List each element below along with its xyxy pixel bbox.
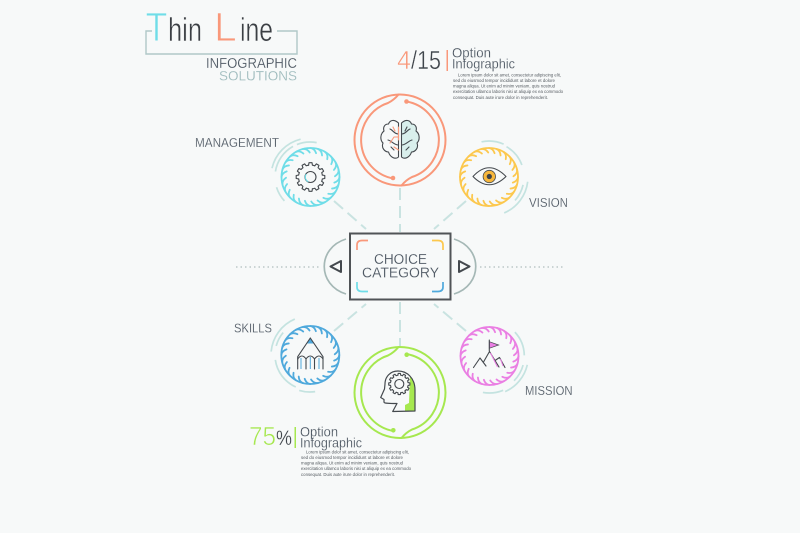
body text: sed do eiusmod tempor incididunt ut labore et dolore [301,455,403,460]
teeth [460,148,518,206]
ring [282,148,340,206]
body text: magna aliqua. Ut enim ad minim veniam, quis nostrud [301,460,403,466]
label: VISION [529,195,568,210]
body text: exercitation ullamco laboris nisi ut aliquip ex ea commodo [453,89,563,94]
ring dots [404,352,409,357]
number: 75 [249,421,276,451]
centre box [350,234,450,300]
bottom callout: % [276,427,292,450]
centre label: CHOICE [374,251,427,268]
icon: eye [473,168,506,185]
label: MANAGEMENT [195,136,279,150]
decorative arcs [261,128,359,226]
bottom callout: Infographic [300,434,362,450]
icon: gear [296,162,325,192]
ring [281,326,339,384]
management node [195,128,359,226]
top callout: Infographic [452,56,515,72]
bar [294,427,296,448]
decorative arcs [441,129,537,225]
label: MISSION [525,383,572,398]
vision node [441,129,568,225]
body text [301,450,411,477]
decorative arcs [440,307,539,405]
ring [460,327,518,385]
title word Thin remainder: hin [168,11,202,48]
right arc [454,239,476,294]
left arc [324,239,346,294]
mission node [440,307,572,405]
centre selector: CATEGORY [362,264,439,282]
head outline [381,371,415,412]
head gear [389,373,410,395]
bottom big circle with head [354,347,446,438]
body text: consequat. Duis aute irure dolor in reprehenderit. [453,95,548,100]
left arrow [330,261,341,272]
title block [146,4,297,84]
body text [453,72,563,100]
teeth [281,148,340,206]
teeth [460,327,519,385]
icon: brain [381,120,419,158]
bottom callout [249,421,411,477]
heading: Option [452,44,491,60]
heading: Option [300,424,338,440]
label: SKILLS [234,320,272,336]
centre selector [324,234,476,300]
title letter T: T [146,4,168,50]
title word Line remainder: ine [240,11,273,48]
right arrow [459,261,470,272]
number: 4 [397,45,411,75]
head shading [405,376,414,411]
decorative arcs [264,309,356,401]
teeth [281,326,340,384]
icon: pencil [298,338,323,369]
body text: exercitation ullamco laboris nisi ut aliquip ex ea commodo [301,466,411,471]
top callout: /15 [411,45,441,75]
subtitle infographic: INFOGRAPHIC [206,56,297,72]
bar [446,50,448,71]
body text: sed do eiusmod tempor incididunt ut labore et dolore [453,78,555,83]
corner brackets [357,240,443,292]
icon: head with gear [381,371,415,412]
ring dots [404,99,409,104]
dotted horizontal lines [236,266,565,268]
body text: magna aliqua. Ut enim ad minim veniam, quis nostrud [453,84,555,88]
body text: consequat. Duis aute irure dolor in reprehenderit. [301,472,395,477]
title letter L: L [214,4,237,50]
subtitle solutions: SOLUTIONS [219,68,297,84]
dashed connectors [334,188,466,346]
title bracket [146,31,297,54]
ring [460,148,518,206]
top callout [397,44,563,100]
body text: Lorem ipsum dolor sit amet, consectetur adipiscing elit, [458,72,561,78]
ring [354,94,446,186]
top big circle with brain [354,94,446,186]
skills node [234,309,356,401]
body text: Lorem ipsum dolor sit amet, consectetur adipiscing elit, [306,450,409,454]
icon: mountain flag [474,340,505,368]
ring [354,347,446,438]
